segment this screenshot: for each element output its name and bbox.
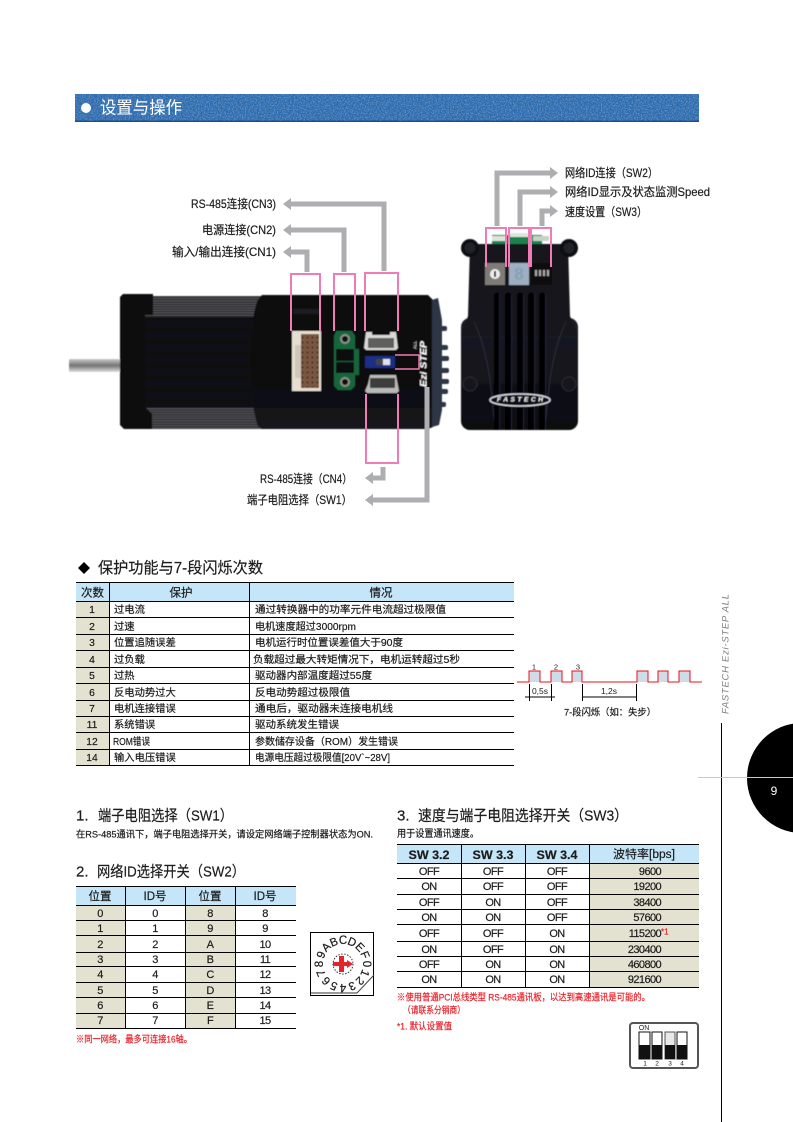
heading: section 1: 1.	[76, 808, 89, 824]
table: network ID: 8	[207, 908, 213, 920]
table: baud rate: OFF	[547, 912, 568, 924]
arrow: SW2	[497, 167, 558, 226]
table: network ID: 0	[97, 908, 103, 920]
table: baud rate: 230400	[628, 944, 661, 956]
table: baud rate	[397, 844, 699, 988]
table: baud rate: OFF	[483, 944, 504, 956]
page number: 9	[771, 784, 778, 798]
icon: rotary dial: 5	[329, 978, 339, 992]
table: protection functions: 5	[89, 671, 95, 682]
icon: DIP switch	[630, 1023, 698, 1068]
table: protection functions: 反电动势超过极限值	[255, 686, 350, 699]
table: protection functions: 电机运行时位置误差值大于90度	[255, 636, 403, 649]
page tab shape	[747, 723, 793, 833]
FASTECH logo	[490, 394, 550, 406]
table: protection functions: 电源电压超过极限值[20V`~28V]	[255, 751, 390, 764]
table: network ID: 14	[259, 1000, 271, 1012]
table: protection functions: 输入电压错误	[114, 751, 176, 764]
table: baud rate: ON	[549, 974, 565, 986]
CN3 connector	[364, 332, 398, 350]
seven segment display: 8	[514, 264, 524, 284]
chart: seven segment blink waveform	[517, 662, 702, 718]
table: protection functions: 驱动系统发生错误	[255, 718, 339, 731]
arrow: SW1	[365, 387, 427, 506]
Ezi-STEP logo	[412, 340, 430, 387]
table: baud rate: ON	[421, 912, 437, 924]
table: baud rate: OFF	[547, 897, 568, 909]
table: network ID: 15	[259, 1015, 271, 1027]
table: protection functions: 过热	[114, 669, 135, 682]
driver housing	[250, 295, 433, 429]
table: network ID: 7	[152, 1015, 158, 1027]
table: network ID: 8	[262, 908, 268, 920]
top plate	[461, 244, 578, 336]
arrow: power CN2	[283, 224, 344, 272]
table: protection functions: 保护	[170, 585, 192, 599]
vertical grooves	[494, 292, 546, 430]
arrow: RS-485 CN3	[283, 198, 384, 271]
table: baud rate: 波特率[bps]	[613, 847, 675, 861]
DIP switch block	[531, 263, 552, 285]
heading: section 3: 速度与端子电阻选择开关（SW3）	[418, 808, 628, 824]
table: network ID: C	[206, 969, 214, 981]
table: protection functions: 负载超过最大转矩情况下，电机运转超过5秒	[253, 653, 460, 666]
table: protection functions: 6	[89, 688, 95, 699]
table: network ID: ID号	[254, 890, 276, 903]
product name: FASTECH Ezi-STEP ALL	[720, 594, 732, 714]
table: network ID: F	[207, 1015, 214, 1027]
table: network ID: 6	[152, 1000, 158, 1012]
icon: rotary dial: 3	[347, 978, 357, 992]
table: network ID: 4	[152, 969, 158, 981]
lower body	[461, 318, 578, 430]
table: protection functions: 通过转换器中的功率元件电流超过极限值	[255, 603, 446, 616]
icon: DIP switch: 1	[643, 1060, 647, 1068]
top connectors	[492, 233, 549, 245]
table: network ID: 10	[259, 939, 271, 951]
table: protection functions: 参数储存设备（ROM）发生错误	[255, 735, 398, 748]
icon: DIP switch: 4	[680, 1060, 684, 1068]
heat sink fins	[432, 298, 449, 427]
table: protection functions: 情况	[370, 586, 393, 599]
icon: DIP switch: ON	[639, 1025, 649, 1032]
icon: rotary dial: 0	[360, 961, 372, 967]
body contour lines	[474, 322, 566, 430]
label: CN2: 电源连接(CN2)	[202, 222, 276, 237]
vertical rule	[721, 723, 722, 1122]
motor ribbed body	[145, 296, 263, 429]
heading: section 3: 3.	[397, 808, 410, 824]
table: baud rate: 38400	[633, 897, 661, 909]
rotary switch	[485, 263, 505, 285]
table: baud rate: 9600	[639, 866, 661, 878]
driver rear view photo	[461, 233, 578, 430]
table: protection functions: 反电动势过大	[114, 686, 176, 699]
icon: rotary dial: 9	[315, 950, 329, 960]
text: section 3 description: 用于设置通讯速度。	[397, 827, 479, 840]
table: network ID: 9	[262, 923, 268, 935]
icon: rotary dial: 8	[314, 961, 326, 967]
dimension 1.2s	[582, 684, 637, 701]
label: SW2: 网络ID连接（SW2）	[565, 165, 658, 180]
table: baud rate: ON	[549, 959, 565, 971]
table: network ID: 7	[97, 1015, 103, 1027]
table: network ID: 1	[152, 923, 158, 935]
table: baud rate: ON	[485, 897, 501, 909]
pulse numbers: 2	[554, 662, 558, 672]
table: baud rate: 921600	[628, 974, 661, 986]
table: protection functions: 过负载	[114, 653, 145, 666]
table: protection functions: 通电后，驱动器未连接电机线	[255, 702, 393, 715]
text: section 1 description: 在RS-485通讯下，端子电阻选择开关，请设定网络端子控制器状态为ON.	[76, 828, 373, 840]
table: network ID: 5	[97, 985, 103, 997]
table: baud rate: 57600	[633, 912, 661, 924]
table: network ID: 9	[207, 923, 213, 935]
icon: rotary dial: 2	[353, 974, 366, 987]
note: default value: *1. 默认设置值	[397, 1020, 452, 1032]
pulse numbers	[532, 662, 580, 672]
table: baud rate: SW 3.4	[536, 848, 578, 862]
table: baud rate: OFF	[483, 881, 504, 893]
heading: section 1: 端子电阻选择（SW1）	[98, 808, 233, 824]
table: baud rate: ON	[485, 912, 501, 924]
waveform caption: 7-段闪烁（如：失步）	[564, 706, 656, 718]
dimension 0.5s: 0,5s	[532, 686, 548, 696]
pulse fills	[529, 671, 690, 682]
pulse line	[517, 671, 702, 682]
motor flange	[120, 294, 153, 429]
table: protection functions: 1	[89, 605, 95, 616]
horizontal rule	[698, 777, 793, 778]
mounting screws	[461, 239, 578, 391]
table: protection functions: 电机连接错误	[114, 702, 176, 715]
icon: DIP switch: 2	[655, 1060, 659, 1068]
icon: rotary dial: E	[352, 941, 366, 955]
table: protection functions	[76, 582, 514, 766]
icon: rotary dial: 1	[357, 968, 371, 978]
motor shaft	[69, 359, 120, 372]
header bar	[75, 94, 699, 122]
table: protection functions: 过电流	[114, 603, 145, 616]
CN1 connector	[292, 331, 321, 391]
table: network ID: E	[207, 1000, 214, 1012]
table: baud rate: OFF	[419, 959, 440, 971]
table: baud rate: OFF	[419, 928, 440, 940]
Ezi-STEP logo: Ezi STEP	[418, 340, 430, 387]
table: protection functions: ROM错误	[113, 735, 150, 748]
table: baud rate: 19200	[633, 881, 661, 893]
table: network ID: 3	[97, 954, 103, 966]
heading: protection: 保护功能与7-段闪烁次数	[98, 559, 263, 577]
table: network ID: 5	[152, 985, 158, 997]
table: baud rate: ON	[485, 959, 501, 971]
table: network ID: D	[206, 985, 214, 997]
icon: rotary dial: C	[339, 935, 347, 947]
arrow: SW3	[542, 205, 558, 226]
table: baud rate: OFF	[547, 866, 568, 878]
heading: section 2: 网络ID选择开关（SW2）	[97, 864, 245, 880]
icon: rotary dial: 6	[320, 974, 333, 987]
icon: rotary dial: 7	[315, 968, 329, 978]
table: baud rate: ON	[421, 944, 437, 956]
label: SW1: 端子电阻选择（SW1）	[247, 493, 352, 507]
table: baud rate: ON	[549, 928, 565, 940]
table: protection functions: 2	[89, 622, 95, 633]
table: network ID: 4	[97, 969, 103, 981]
note: SW3 communication: （请联系分销商）	[403, 1004, 465, 1016]
pulse numbers: 3	[576, 662, 580, 672]
table: baud rate: ON	[421, 881, 437, 893]
table: network ID: 2	[97, 939, 103, 951]
side tab	[698, 594, 793, 1122]
table: protection functions: 3	[89, 638, 95, 649]
seven segment display	[509, 263, 529, 285]
table: baud rate: SW 3.2	[408, 848, 450, 862]
heading: section 2: 2.	[76, 864, 89, 880]
icon: rotary dial	[310, 932, 374, 996]
icon: rotary dial: 4	[339, 981, 346, 993]
icon: rotary dial: F	[357, 950, 371, 961]
table: protection functions: 12	[86, 737, 98, 748]
icon: rotary dial: B	[328, 936, 340, 950]
label: SW3: 速度设置（SW3）	[565, 204, 647, 219]
arrow: RS-485 CN4	[365, 467, 383, 484]
table: baud rate: *1	[661, 928, 669, 936]
table: network ID	[76, 886, 296, 1029]
label: CN1: 输入/输出连接(CN1)	[172, 244, 276, 259]
table: protection functions: 系统错误	[114, 718, 155, 731]
table: network ID: 11	[260, 954, 271, 966]
table: network ID: 12	[259, 969, 271, 981]
table: protection functions: 7	[89, 704, 95, 715]
table: network ID: 位置	[88, 889, 112, 903]
table: baud rate: 460800	[628, 959, 661, 971]
note: SW2: ※同一网络，最多可连接16轴。	[76, 1034, 192, 1046]
table: baud rate: OFF	[547, 881, 568, 893]
table: network ID: 6	[97, 1000, 103, 1012]
CN4 connector	[365, 375, 399, 393]
pulse numbers: 1	[532, 662, 536, 672]
arrow: IO CN1	[283, 246, 307, 272]
table: baud rate: ON	[549, 944, 565, 956]
table: protection functions: 11	[87, 720, 98, 731]
table: baud rate: 115200	[629, 928, 661, 940]
table: protection functions: 位置追随误差	[114, 636, 176, 649]
callout frames on side view	[291, 273, 419, 463]
label: CN4: RS-485连接（CN4）	[260, 471, 352, 486]
table: network ID: 3	[152, 954, 158, 966]
motor side view photo	[69, 294, 449, 429]
table: network ID: 0	[152, 908, 158, 920]
header bar: 设置与操作	[100, 98, 182, 118]
table: protection functions: 电机速度超过3000rpm	[255, 620, 356, 633]
icon: rotary dial: D	[346, 936, 358, 950]
table: protection functions: 过速	[114, 620, 135, 633]
label: display: 网络ID显示及状态监测Speed	[565, 184, 710, 199]
dimension 1.2s: 1,2s	[601, 686, 617, 696]
table: network ID: B	[207, 954, 214, 966]
dimension 0.5s	[525, 684, 555, 701]
table: baud rate: OFF	[419, 866, 440, 878]
table: network ID: 13	[259, 985, 271, 997]
table: baud rate: ON	[485, 974, 501, 986]
table: protection functions: 次数	[81, 585, 104, 599]
table: network ID: ID号	[144, 890, 166, 903]
icon: DIP switch: 3	[668, 1060, 672, 1068]
arrow: display	[520, 186, 558, 226]
table: protection functions: 14	[86, 753, 98, 764]
note: SW3 communication: ※使用普通PCI总线类型 RS-485通讯板，以达到高速通讯是可能的。	[397, 992, 650, 1004]
table: baud rate: OFF	[483, 866, 504, 878]
table: network ID: 2	[152, 939, 158, 951]
table: baud rate: OFF	[483, 928, 504, 940]
resistor switch	[365, 356, 395, 368]
note: SW3 communication	[397, 992, 650, 1016]
Ezi-STEP logo: ALL	[412, 341, 418, 349]
table: protection functions: 4	[89, 655, 95, 666]
table: baud rate: SW 3.3	[472, 848, 514, 862]
CN2 connector	[334, 331, 359, 390]
label: CN3: RS-485连接(CN3)	[191, 196, 276, 211]
table: baud rate: OFF	[419, 897, 440, 909]
table: network ID: 1	[97, 923, 103, 935]
table: network ID: 位置	[198, 889, 222, 903]
table: protection functions: 驱动器内部温度超过55度	[255, 669, 372, 682]
icon: rotary dial: A	[320, 941, 334, 955]
housing highlight	[293, 309, 321, 314]
table: network ID: A	[207, 939, 215, 951]
FASTECH logo: FASTECH	[497, 396, 543, 404]
table: baud rate: ON	[421, 974, 437, 986]
callout frames on rear view	[486, 228, 551, 267]
